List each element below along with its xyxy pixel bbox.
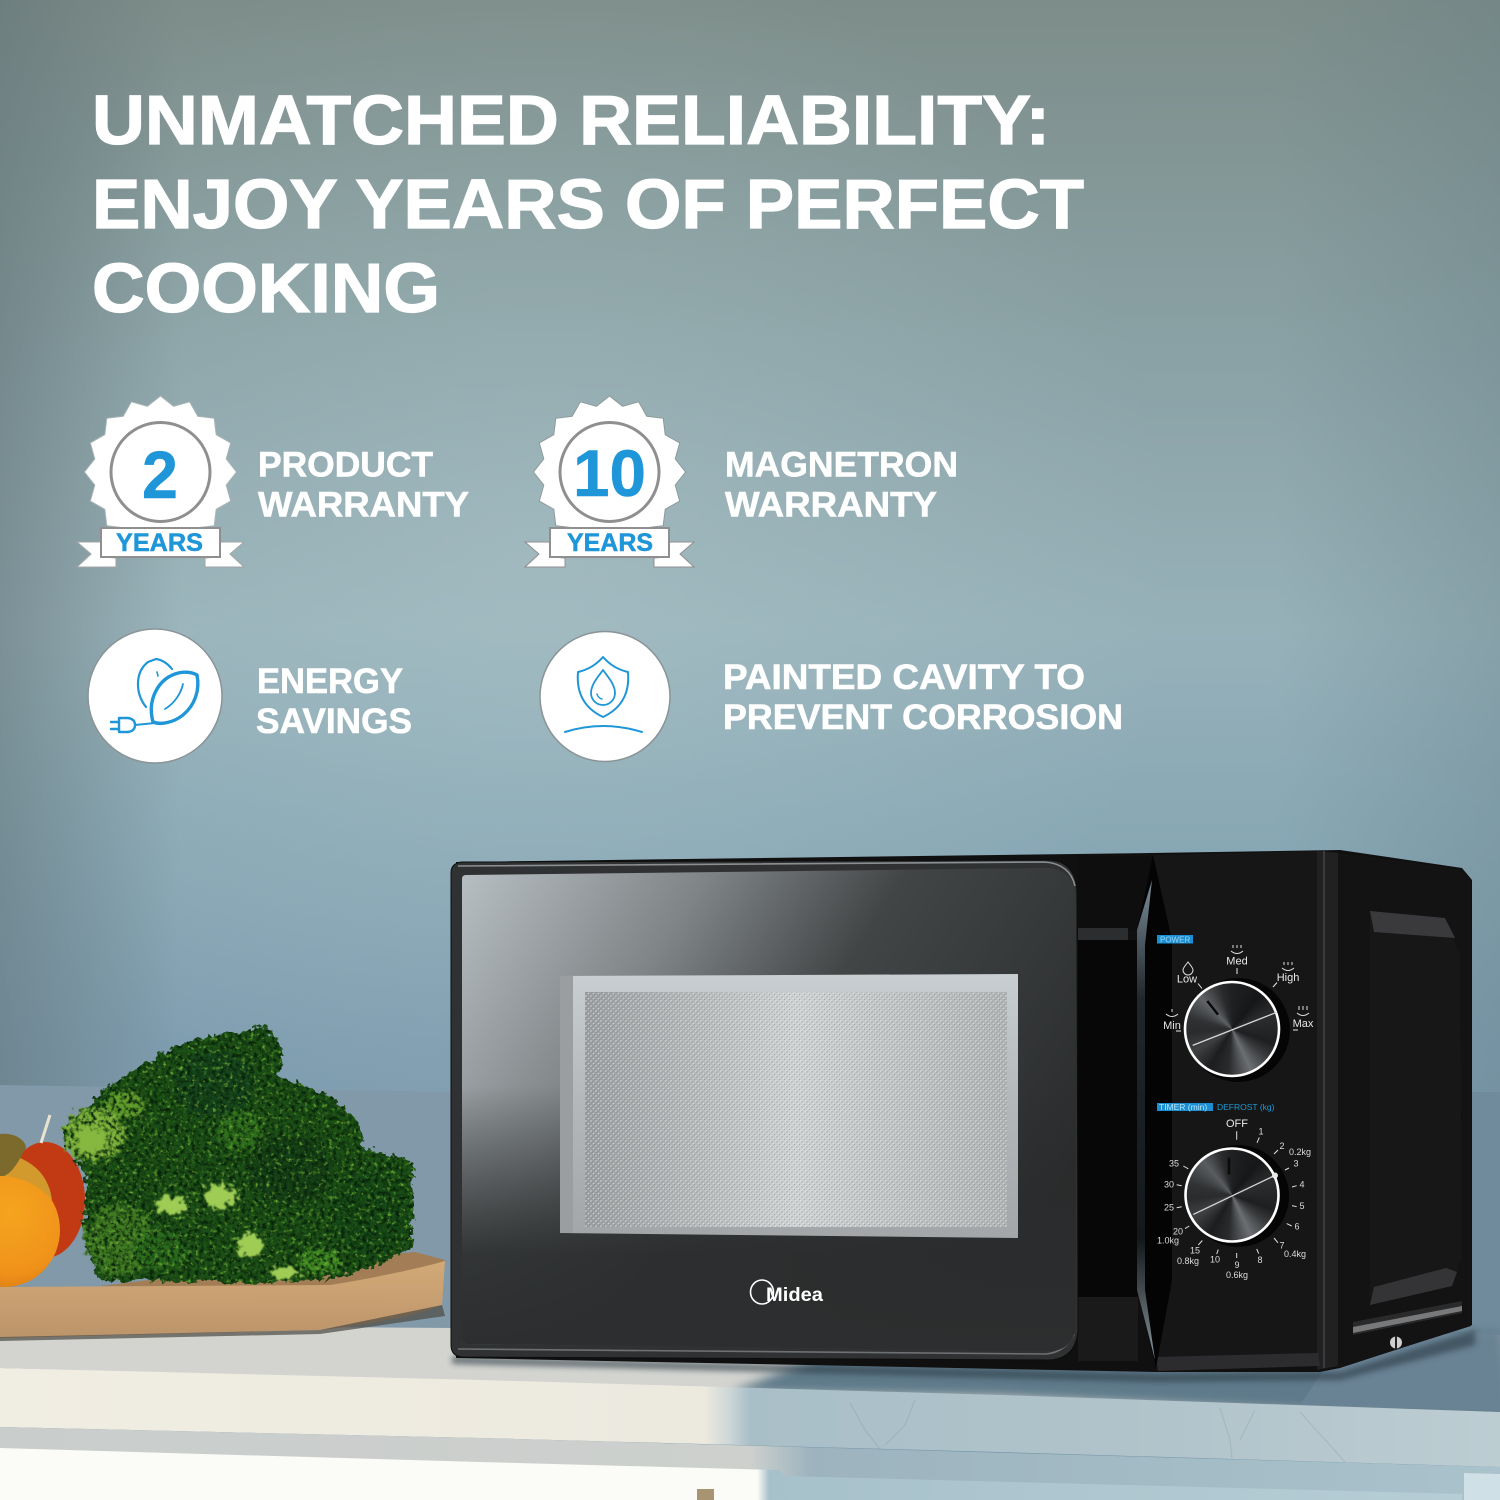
- label: product warranty: WARRANTY: [258, 484, 469, 524]
- power dial markings: Med: [1226, 956, 1248, 968]
- timer dial markings: 5: [1299, 1201, 1305, 1211]
- control panel: [1137, 851, 1338, 1371]
- door frame: [451, 860, 1078, 1360]
- power dial markings: Max: [1293, 1018, 1314, 1030]
- timer dial markings: 0.6kg: [1226, 1270, 1248, 1280]
- label: energy savings: [256, 661, 412, 741]
- timer knob: [1186, 1145, 1289, 1247]
- brand logo: Midea: [766, 1285, 823, 1306]
- timer dial markings: 4: [1299, 1180, 1305, 1190]
- door window: [560, 974, 1018, 1238]
- power dial markings: High: [1277, 972, 1299, 984]
- label: product warranty: [258, 444, 469, 524]
- timer dial markings: 30: [1164, 1180, 1174, 1190]
- title: UNMATCHED RELIABILITY:: [92, 81, 1050, 159]
- timer dial markings: 0.4kg: [1284, 1249, 1306, 1259]
- label: magnetron warranty: WARRANTY: [725, 484, 937, 524]
- timer dial markings: 15: [1190, 1246, 1200, 1256]
- title: COOKING: [92, 249, 440, 327]
- timer dial markings: 25: [1164, 1202, 1174, 1212]
- timer dial markings: 6: [1294, 1221, 1300, 1231]
- badge: 10 years: 10: [573, 436, 646, 510]
- microwave body: [456, 850, 1472, 1372]
- cutting board: [0, 1252, 445, 1341]
- timer dial markings: 3: [1293, 1158, 1299, 1168]
- timer dial markings: 10: [1210, 1255, 1220, 1265]
- label: magnetron warranty: MAGNETRON: [725, 444, 958, 484]
- microwave shadow on counter: [452, 1330, 1475, 1382]
- handle recess: [1078, 856, 1153, 1361]
- power dial markings: [1163, 945, 1314, 1032]
- label: energy savings: ENERGY: [257, 661, 403, 701]
- power dial markings: Low: [1177, 974, 1197, 986]
- power dial markings: Min: [1163, 1020, 1181, 1032]
- timer label: DEFROST (kg): [1217, 1102, 1275, 1112]
- badge: 2 years: YEARS: [116, 529, 203, 557]
- label: energy savings: SAVINGS: [256, 701, 412, 741]
- door glass: [462, 868, 1076, 1351]
- timer label: TIMER (min): [1159, 1102, 1207, 1112]
- timer dial markings: [1157, 1118, 1311, 1280]
- timer label: [1157, 1102, 1275, 1112]
- power label: POWER: [1160, 936, 1190, 944]
- timer dial markings: 9: [1234, 1260, 1240, 1270]
- badge: 2 years: 2: [142, 438, 178, 513]
- badge: 10 years: [525, 396, 694, 567]
- vegetables: leafy greens: [63, 1027, 413, 1283]
- timer dial markings: 0.8kg: [1177, 1256, 1199, 1266]
- label: painted cavity: PREVENT CORROSION: [723, 697, 1123, 737]
- timer dial markings: 20: [1173, 1226, 1183, 1236]
- icon: energy savings leaf and plug: [88, 629, 222, 763]
- label: magnetron warranty: [725, 444, 958, 524]
- timer dial markings: 0.2kg: [1289, 1147, 1311, 1157]
- timer dial markings: 1: [1258, 1127, 1264, 1137]
- badge: 2 years: [77, 396, 244, 567]
- label: product warranty: PRODUCT: [258, 444, 433, 484]
- timer dial markings: 7: [1279, 1240, 1285, 1250]
- timer dial markings: 8: [1257, 1255, 1263, 1265]
- microwave: [451, 850, 1475, 1382]
- badge: 10 years: YEARS: [567, 529, 653, 557]
- icon: shield and water drop: [540, 632, 670, 762]
- label: painted cavity: PAINTED CAVITY TO: [723, 657, 1085, 697]
- label: painted cavity: [723, 657, 1123, 737]
- timer dial markings: OFF: [1226, 1118, 1248, 1130]
- power knob: [1185, 978, 1290, 1082]
- kitchen countertop: [0, 1325, 1500, 1500]
- timer dial markings: 1.0kg: [1157, 1236, 1179, 1246]
- title: ENJOY YEARS OF PERFECT: [92, 165, 1084, 243]
- timer dial markings: 35: [1169, 1159, 1179, 1169]
- side panel: [1338, 853, 1471, 1368]
- title: [92, 81, 1084, 327]
- timer dial markings: 2: [1279, 1141, 1285, 1151]
- vegetables: tomato and pepper: [0, 1115, 85, 1287]
- brand logo: [750, 1280, 823, 1306]
